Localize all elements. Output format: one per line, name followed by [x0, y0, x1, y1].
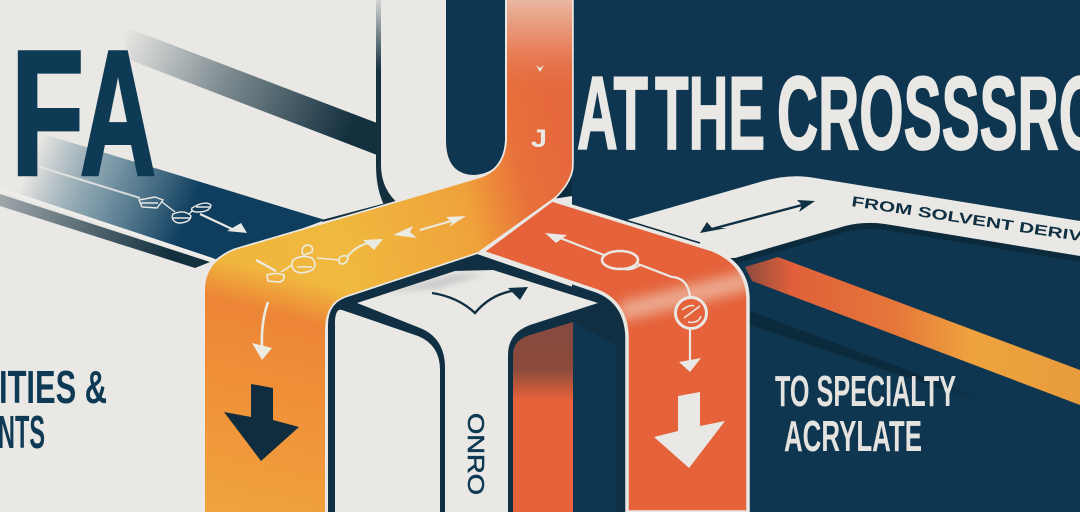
dark diagonal band, upper left [120, 25, 377, 155]
left white panel [335, 310, 440, 512]
icon: double arrow [393, 216, 466, 238]
double arrow on road [700, 200, 815, 233]
dark edge of white vertical band [376, 0, 405, 207]
title: FA [11, 14, 156, 212]
road surface [627, 176, 1080, 258]
letter F: F [11, 14, 84, 212]
dark upper edge line [625, 220, 700, 243]
word THE: THE [655, 56, 765, 172]
right red panel [513, 322, 573, 512]
icon: thin down arrow [252, 302, 272, 360]
caption: acrylate: ACRYLATE [784, 412, 922, 461]
right caption [775, 367, 956, 461]
road label: FROM SOLVENT DERIV [850, 194, 1080, 245]
icon: molecule chain and arrow [139, 197, 247, 233]
caption line two: NTS [0, 406, 45, 458]
white edge line [0, 189, 214, 260]
white road, upper right [627, 176, 1080, 258]
orange diagonal streak, right [745, 257, 1080, 405]
orange-yellow band [200, 0, 580, 512]
band outline [205, 0, 572, 512]
right navy panel [573, 322, 616, 512]
central box [328, 254, 627, 512]
word AT: AT [577, 56, 648, 172]
icon: molecule chain [256, 239, 383, 282]
shadow streak, right [750, 311, 990, 405]
navy U channel [446, 0, 505, 175]
white divider beside navy channel [480, 0, 506, 178]
dark wedge below orange band [553, 160, 572, 199]
letter A: A [80, 14, 156, 212]
icon: reaction path [545, 233, 706, 372]
band surface [482, 200, 748, 512]
letter J: J [531, 125, 547, 153]
white roof and centre column [357, 270, 598, 512]
white vertical band [381, 0, 447, 205]
box dark outline [328, 254, 627, 512]
dark line above yellow band [322, 204, 386, 221]
icon: big dark down arrow [224, 384, 299, 461]
pale inner line [40, 167, 140, 198]
blue pathway, left [0, 133, 325, 268]
vertical label: ONRO [463, 413, 489, 495]
background: navy right side [572, 0, 1080, 512]
band highlight [620, 270, 750, 322]
left caption [0, 361, 107, 458]
roof shading [385, 274, 485, 293]
lower dark strip [0, 194, 210, 268]
red-orange band, right [482, 200, 750, 512]
curved branch arrow [432, 287, 528, 313]
title: AT THE CROSSSRO [577, 56, 1080, 172]
caption line one: ITIES & [0, 361, 107, 413]
icon: chevron mark [536, 65, 544, 72]
band fill [200, 0, 580, 512]
road shadow, upper right [627, 182, 1080, 264]
icon: big white down arrow [654, 392, 725, 468]
blue band [0, 133, 325, 260]
